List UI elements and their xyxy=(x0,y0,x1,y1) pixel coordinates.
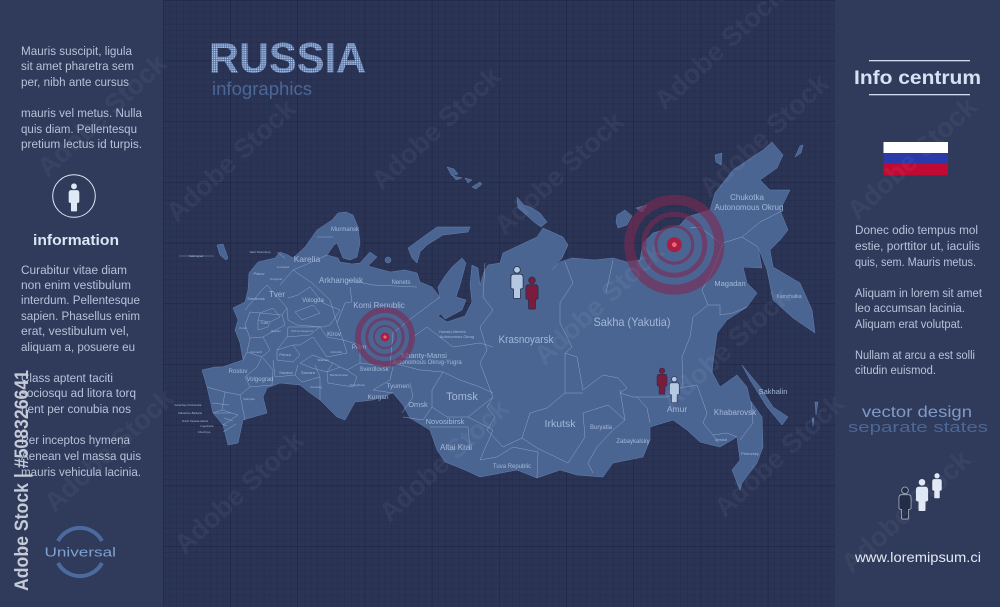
heading: information: information xyxy=(33,233,119,249)
stock watermarks: Adobe Stock xyxy=(655,281,797,416)
region labels: Nizhny Novgorod xyxy=(291,329,313,333)
logo: Universal xyxy=(44,528,116,576)
region labels: Novosibirsk xyxy=(426,417,465,426)
region labels: Novgorod xyxy=(270,277,283,281)
left text block 1: sit amet pharetra sem xyxy=(21,59,134,73)
region labels: Orenburg xyxy=(310,385,322,389)
region labels: Penza xyxy=(279,352,291,357)
map of Russia xyxy=(175,142,818,490)
region labels: Saint Petersburg xyxy=(250,250,271,254)
region labels: Karelia xyxy=(294,254,320,264)
region labels: Tomsk xyxy=(446,391,478,403)
region labels: Krasnoyarsk xyxy=(498,334,554,346)
stock watermarks: Adobe Stock xyxy=(168,425,310,560)
stock watermarks: Adobe Stock xyxy=(835,444,977,579)
right text block xyxy=(855,223,983,377)
region labels: Yamalo-Nenets xyxy=(438,329,466,334)
stock watermarks: Adobe Stock xyxy=(160,93,302,228)
right text block: Aliquam erat volutpat. xyxy=(855,317,963,331)
region labels: Kursk xyxy=(239,326,247,330)
right text block: Aliquam in lorem sit amet xyxy=(855,286,983,300)
region labels: Jewish xyxy=(715,437,727,442)
leader lines xyxy=(179,252,285,432)
region labels: Komi Republic xyxy=(353,301,405,310)
region labels: Perm xyxy=(352,345,366,351)
region labels: Sakha (Yakutia) xyxy=(594,315,671,329)
region labels: Ingushetia xyxy=(201,424,214,428)
panel: right sidebar xyxy=(835,0,1000,607)
left text block 2: sociosqu ad litora torq xyxy=(21,386,136,400)
logo: Universal: Universal xyxy=(44,546,116,560)
left text block 1: pretium lectus id turpis. xyxy=(21,137,142,151)
left text block 1: quis diam. Pellentesqu xyxy=(21,122,137,136)
left text block 2: Curabitur vitae diam xyxy=(21,263,127,277)
region labels: Kamchatka xyxy=(776,294,802,300)
region labels: Kabardino-Balkaria xyxy=(178,411,202,415)
panel: central grid background xyxy=(163,0,835,607)
left text block 2: Per inceptos hymena xyxy=(21,433,130,447)
region labels: Omsk xyxy=(408,400,428,409)
region borders xyxy=(207,212,780,478)
region labels: Rostov xyxy=(229,369,247,375)
region labels: Tuva Republic xyxy=(493,464,531,470)
header: Info centrum: Info centrum xyxy=(854,67,981,89)
region labels: Voronezh xyxy=(250,350,262,354)
vertical stock credit: Adobe Stock | #508326641 xyxy=(12,370,33,591)
caption: vector design: vector design xyxy=(862,404,972,421)
region labels: Primorsky xyxy=(741,451,759,456)
stock watermarks: Adobe Stock xyxy=(841,91,983,226)
right text block: Nullam at arcu a est solli xyxy=(855,348,975,362)
icon: light person Amur xyxy=(669,377,679,403)
icon: person in circle xyxy=(53,175,95,217)
region labels: Autonomous Okrug xyxy=(440,334,474,339)
title: RUSSIA: RUSSIA xyxy=(209,34,366,82)
left text block 2: mauris vehicula lacinia. xyxy=(21,465,141,479)
region labels: Smolensk xyxy=(247,296,265,301)
icon: three people xyxy=(899,473,942,519)
stock watermarks: Adobe Stock xyxy=(693,68,835,203)
panel: left sidebar xyxy=(0,0,163,607)
left text block 1: Mauris suscipit, ligula xyxy=(21,44,132,58)
left text block 2: interdum. Pellentesque xyxy=(21,293,140,307)
region labels: Ryazan xyxy=(271,329,281,333)
subtitle: infographics: infographics xyxy=(212,79,312,99)
header: Info centrum xyxy=(854,60,981,95)
region labels: Chelyabinsk xyxy=(349,383,365,387)
right text block: quis, sem. Mauris metus. xyxy=(855,255,976,269)
stock watermarks: Adobe Stock xyxy=(488,106,630,241)
icon: light person Krasnoyarsk xyxy=(511,267,523,299)
left text block 1: mauris vel metus. Nulla xyxy=(21,106,142,120)
region labels: Buryatia xyxy=(590,425,613,431)
landmass and islands xyxy=(202,142,818,490)
right text block: Donec odio tempus mol xyxy=(855,223,978,237)
region labels: Chechnya xyxy=(198,430,211,434)
left text block 1 xyxy=(21,44,142,151)
stock watermarks: Adobe Stock xyxy=(528,236,670,371)
stock watermarks: Adobe Stock xyxy=(365,61,507,196)
left text block 2: non enim vestibulum xyxy=(21,278,131,292)
region labels: Tatarstan xyxy=(317,358,329,362)
stock watermarks: Adobe Stock xyxy=(708,388,850,523)
region labels: Tver xyxy=(269,290,285,299)
region labels: Leningrad xyxy=(277,265,290,269)
region labels: North Ossetia-Alania xyxy=(182,419,208,423)
region labels: Kurgan xyxy=(368,394,389,401)
target marker: west xyxy=(358,310,412,364)
region labels: Pskov xyxy=(254,271,264,276)
right text block: leo accumsan lacinia. xyxy=(855,301,965,315)
left text block 2: sapien. Phasellus enim xyxy=(21,309,140,323)
region labels: Kirov xyxy=(327,332,341,338)
region labels xyxy=(175,193,802,470)
stock watermarks: Adobe Stock xyxy=(38,383,180,518)
region labels: Autonomous Okrug xyxy=(715,203,783,212)
icon: red person Amur xyxy=(657,368,667,394)
region labels: Amur xyxy=(667,404,687,414)
flag of Russia xyxy=(884,142,948,175)
region labels: Khanty-Mansi xyxy=(401,351,447,360)
region labels: Zabaykalsky xyxy=(616,439,650,445)
website URL: www.loremipsum.ci xyxy=(854,549,981,565)
left text block 1: per, nibh ante cursus xyxy=(21,75,129,89)
region labels: Samara xyxy=(301,370,316,375)
region labels: Autonomous Okrug-Yugra xyxy=(392,360,462,366)
target marker: east xyxy=(629,200,719,290)
region labels: Bashkortostan xyxy=(330,373,348,377)
region labels: Udmurtia xyxy=(330,350,342,354)
right text block: estie, porttitor ut, iaculis xyxy=(855,239,980,253)
left text block 2: aliquam a, posuere eu xyxy=(21,340,135,354)
region labels: Khabarovsk xyxy=(714,408,757,417)
region labels: Chukotka xyxy=(730,193,764,202)
region labels: Arkhangelsk xyxy=(319,276,364,285)
region labels: Tyumen xyxy=(386,383,410,390)
region labels: Magadan xyxy=(714,279,746,288)
region labels: Kalmykia xyxy=(243,397,255,401)
left text block 2: Class aptent taciti xyxy=(21,371,113,385)
stock watermarks: Adobe Stock xyxy=(31,48,173,183)
region labels: Karachay-Cherkessia xyxy=(175,403,202,407)
region labels: Nenets xyxy=(391,280,411,286)
region labels: Sakhalin xyxy=(759,387,787,396)
region labels: Saratov xyxy=(279,370,293,375)
left text block 2 xyxy=(21,263,141,479)
icon: red person Krasnoyarsk xyxy=(526,277,538,309)
region labels: Altai Krai xyxy=(440,443,472,452)
region labels: Vologda xyxy=(302,298,324,304)
left text block 2: erat, vestibulum vel, xyxy=(21,324,129,338)
region labels: Tula xyxy=(260,320,269,325)
caption: separate states: separate states xyxy=(848,419,988,436)
region labels: Irkutsk xyxy=(545,418,576,430)
region labels: Murmansk xyxy=(331,227,360,233)
left text block 2: nent per conubia nos xyxy=(21,402,131,416)
stock watermarks: Adobe Stock xyxy=(373,393,515,528)
region labels: Kaliningrad xyxy=(189,254,203,258)
region labels: Sverdlovsk xyxy=(359,367,390,373)
right text block: citudin euismod. xyxy=(855,363,936,377)
region labels: Volgograd xyxy=(246,377,274,383)
left text block 2: Aenean vel massa quis xyxy=(21,449,141,463)
